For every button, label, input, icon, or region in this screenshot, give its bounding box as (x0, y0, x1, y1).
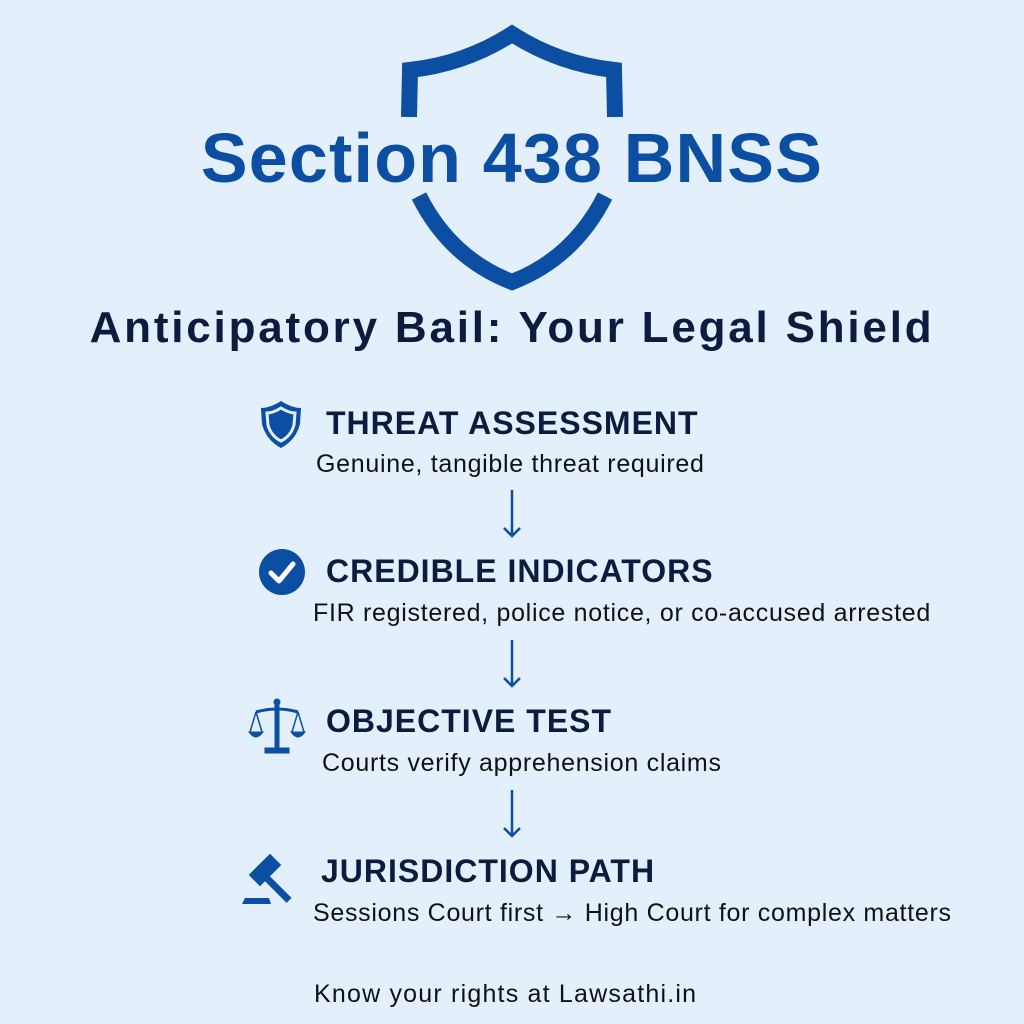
title: Section 438 BNSS (201, 119, 823, 197)
icon: shield (261, 401, 301, 448)
step 3: OBJECTIVE TEST (326, 703, 612, 739)
step 1: Genuine, tangible threat required (316, 450, 705, 478)
footer: Know your rights at Lawsathi.in (314, 980, 697, 1008)
step 3: Courts verify apprehension claims (322, 749, 722, 777)
arrow 1 (503, 490, 521, 538)
step 2 (259, 549, 931, 627)
subtitle: Anticipatory Bail: Your Legal Shield (90, 303, 934, 352)
icon: gavel (242, 854, 292, 904)
step 2: CREDIBLE INDICATORS (326, 553, 714, 589)
step 1 (261, 401, 705, 478)
icon: check circle (259, 549, 305, 595)
icon: scales (248, 698, 306, 754)
step 4: Sessions Court first → High Court for complex matters (313, 899, 952, 927)
step 4 (242, 853, 952, 927)
step 3 (248, 698, 722, 777)
step 4: JURISDICTION PATH (321, 853, 655, 889)
step 2: FIR registered, police notice, or co-accused arrested (313, 599, 931, 627)
arrow 3 (503, 790, 521, 838)
shield outline (401, 24, 623, 291)
step 1: THREAT ASSESSMENT (326, 405, 699, 441)
arrow 2 (503, 640, 521, 688)
